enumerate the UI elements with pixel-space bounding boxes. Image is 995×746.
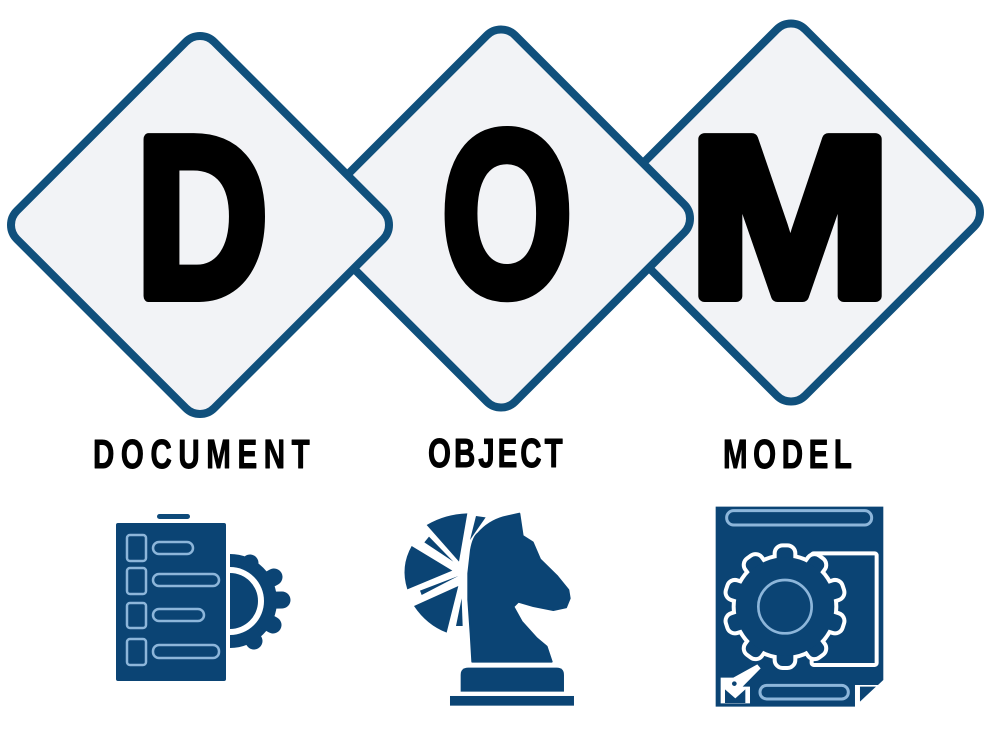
diamond: D [3,28,397,422]
label: DOCUMENT: DOCUMENT [93,431,310,477]
letter D: D [136,89,268,345]
letter M: M [688,90,892,345]
diamond: M [594,15,988,410]
gear [230,554,290,650]
icon: document checklist with gear [116,514,282,681]
icon: model sheet with gear [716,507,887,708]
icon: chess knight with pie fragments [405,513,574,706]
label: MODEL: MODEL [723,431,852,477]
letter O: O [442,84,572,343]
label: OBJECT: OBJECT [428,430,563,476]
check mark [721,664,761,703]
diamond: O [304,21,698,416]
